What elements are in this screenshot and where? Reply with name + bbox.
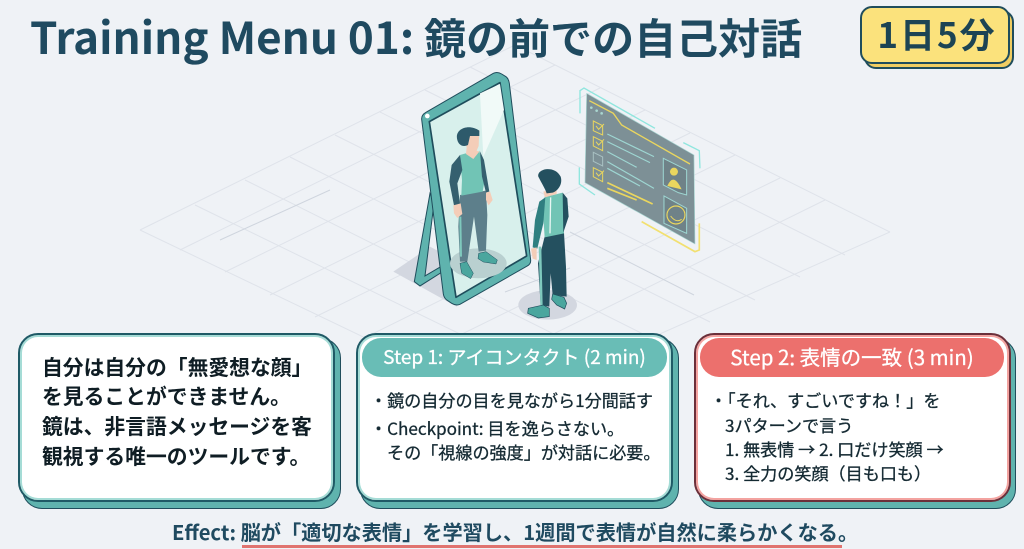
step 1 heading: Step 1: アイコンタクト (2 min) xyxy=(383,343,646,370)
step 1 text: ・鏡の自分の目を見ながら1分間話す xyxy=(370,387,653,412)
step 1 heading xyxy=(362,338,667,377)
step 1 text xyxy=(370,387,660,464)
step 2 heading: Step 2: 表情の一致 (3 min) xyxy=(730,341,974,371)
panel: step 2 xyxy=(694,333,1016,509)
panel: intro xyxy=(18,333,341,509)
intro text: 鏡は、非言語メッセージを客 xyxy=(42,410,312,440)
step 2 text: 3. 全力の笑顔（目も口も） xyxy=(725,460,931,485)
icon: holographic checklist panel xyxy=(579,88,700,252)
badge: 1日5分: 1日5分 xyxy=(877,8,997,59)
reflected figure xyxy=(449,127,497,279)
icon: mirror with reflection xyxy=(393,72,531,307)
badge: 1日5分 xyxy=(860,6,1014,69)
intro text: を見ることができません。 xyxy=(42,380,291,410)
intro text xyxy=(42,351,312,470)
effect statement: Effect: 脳が「適切な表情」を学習し、1週間で表情が自然に柔らかくなる。 xyxy=(172,517,858,546)
icon: person facing mirror xyxy=(518,169,577,320)
step 2 text xyxy=(710,387,944,485)
step 2 text: 1. 無表情 → 2. 口だけ笑顔 → xyxy=(725,436,944,461)
step 2 text: ・「それ、すごいですね！」を xyxy=(710,387,940,412)
panel: step 1 xyxy=(356,333,679,509)
intro text: 観視する唯一のツールです。 xyxy=(42,440,310,470)
intro text: 自分は自分の「無愛想な顔」 xyxy=(42,351,312,381)
step 1 text: ・Checkpoint: 目を逸らさない。 xyxy=(370,415,624,440)
step 2 heading xyxy=(700,338,1004,377)
step 2 text: 3パターンで言う xyxy=(725,412,853,437)
step 1 text: その「視線の強度」が対話に必要。 xyxy=(387,439,660,464)
title: Training Menu 01: 鏡の前での自己対話 xyxy=(30,3,802,67)
